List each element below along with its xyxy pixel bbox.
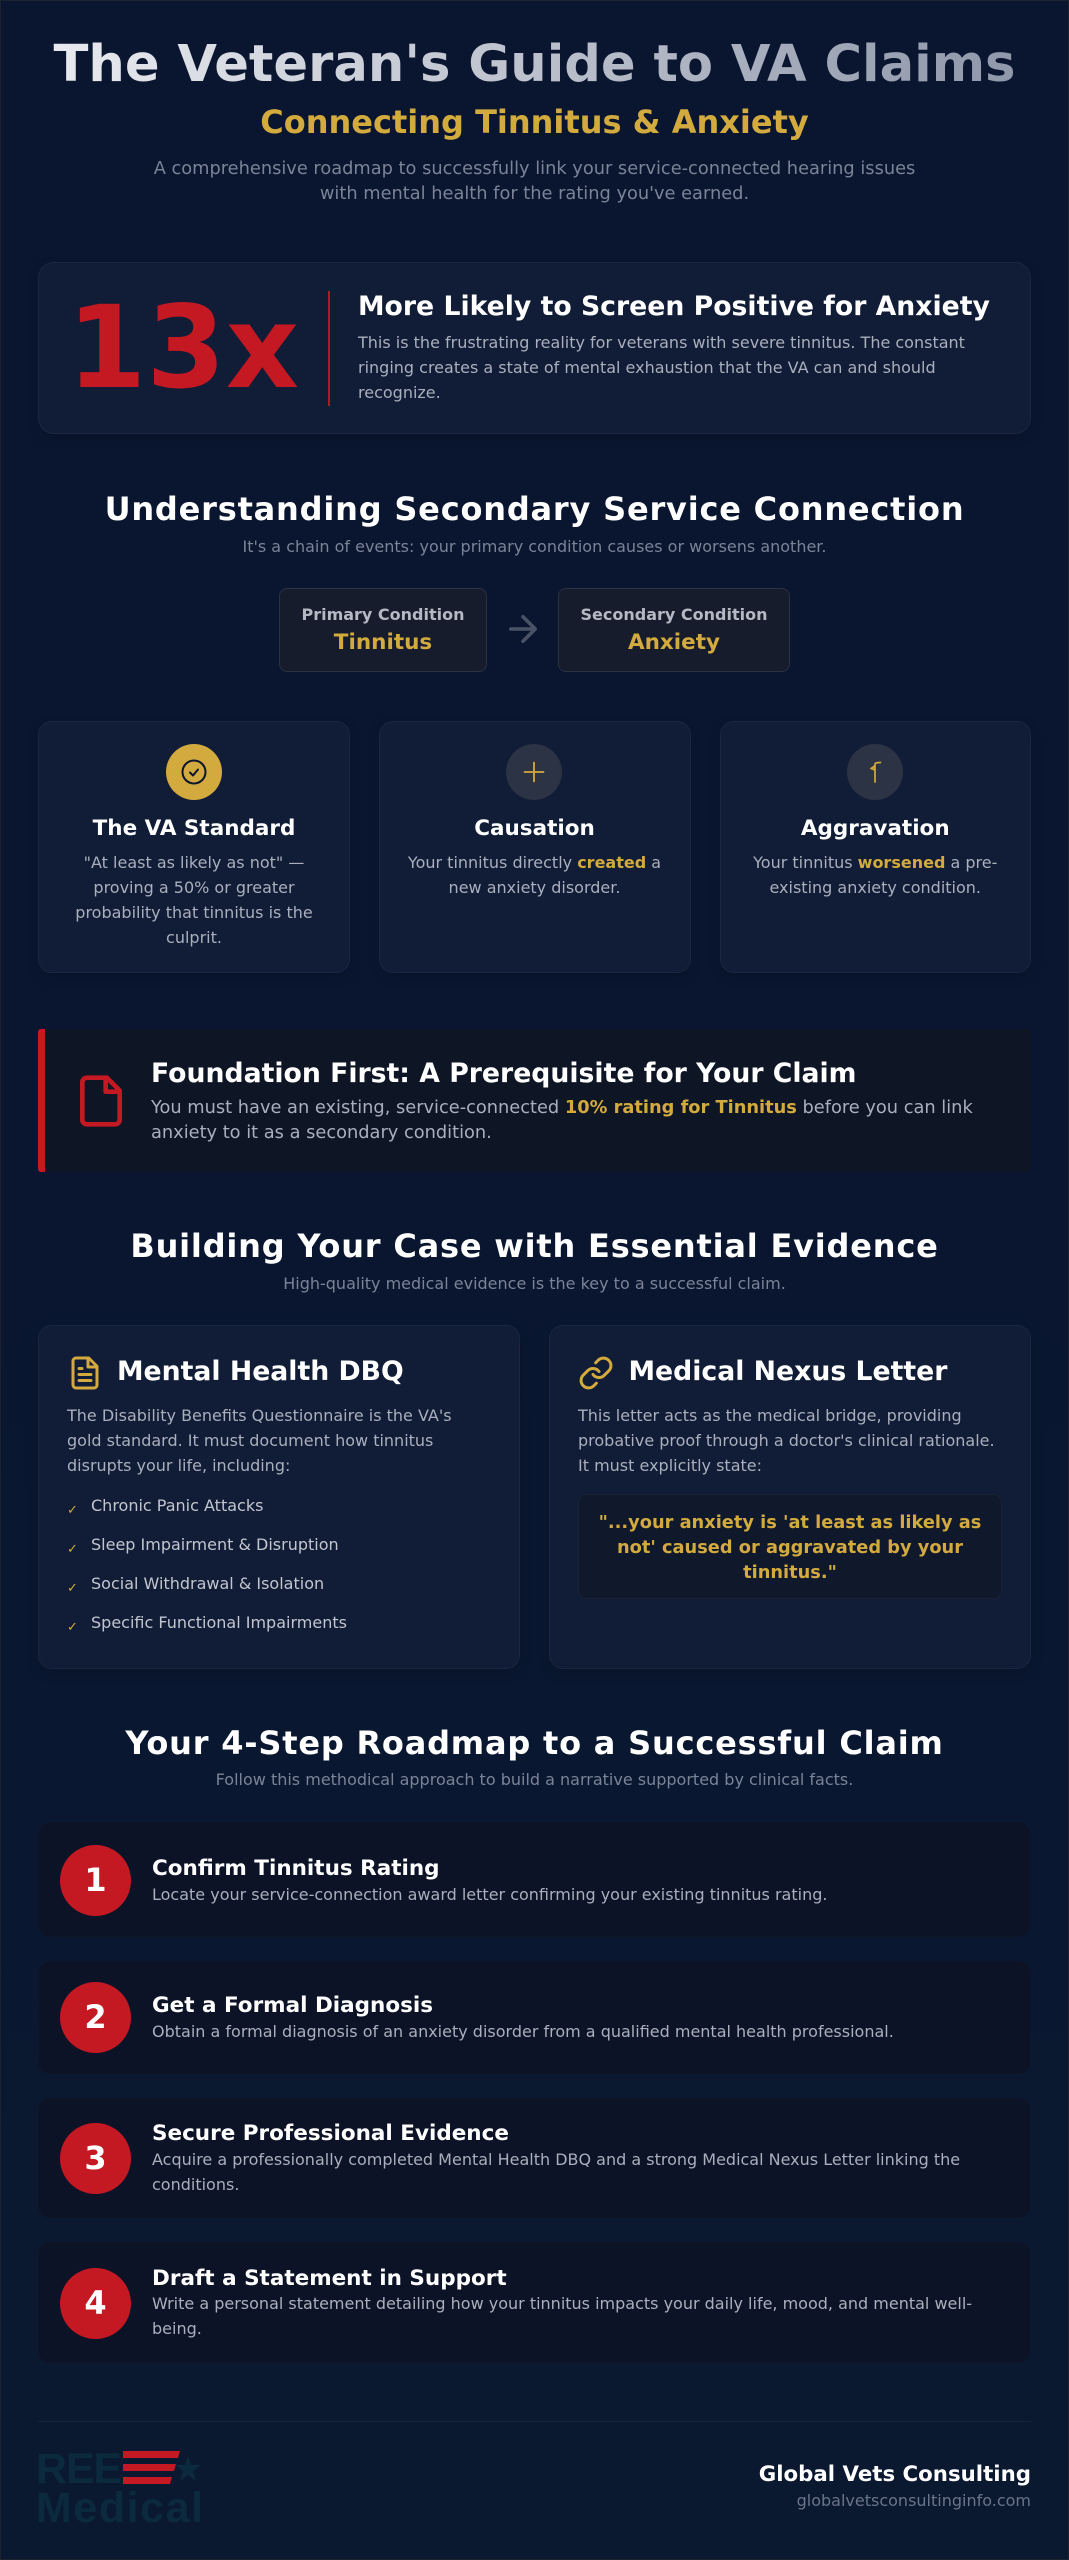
- card text: probative proof through a doctor's clinical rationale.: [578, 1431, 995, 1450]
- icon: file text: [72, 1356, 98, 1390]
- quote box: [578, 1494, 1002, 1599]
- callout text: You must have an existing, service-connected 10% rating for Tinnitus before you can link: [151, 1097, 973, 1118]
- card text: probability that tinnitus is the: [75, 903, 313, 922]
- card text: new anxiety disorder.: [449, 878, 620, 897]
- card text: [753, 853, 997, 897]
- card text: gold standard. It must document how tinnitus: [67, 1431, 433, 1450]
- step text: Obtain a formal diagnosis of an anxiety disorder from a qualified mental health professional.: [152, 2022, 894, 2041]
- card heading: Mental Health DBQ: [117, 1356, 404, 1387]
- section subtitle: High-quality medical evidence is the key to a successful claim.: [283, 1274, 786, 1293]
- statistic description: [358, 333, 965, 402]
- panel: foundation first: [38, 1029, 1031, 1172]
- card text: Your tinnitus directly created a: [408, 853, 661, 872]
- icon: small hook: [847, 744, 903, 800]
- checklist: Social Withdrawal & Isolation: [91, 1574, 324, 1593]
- subtitle: Connecting Tinnitus & Anxiety: [260, 103, 809, 141]
- quote box: tinnitus.": [743, 1562, 837, 1583]
- number badge: [60, 2123, 131, 2194]
- card text: disrupts your life, including:: [67, 1456, 290, 1475]
- icon: link: [580, 1356, 612, 1390]
- step title: Get a Formal Diagnosis: [152, 1993, 433, 2018]
- number badge: [60, 1845, 131, 1916]
- card text: [578, 1406, 995, 1475]
- statistic description: ringing creates a state of mental exhaustion that the VA can and should: [358, 358, 936, 377]
- statistic heading: More Likely to Screen Positive for Anxiety: [358, 291, 990, 322]
- primary condition box: Tinnitus: [334, 630, 432, 655]
- title: The Veteran's Guide to VA Claims: [53, 34, 1016, 94]
- panel: aggravation: [720, 721, 1031, 973]
- footer brand: Global Vets Consulting: [759, 2462, 1031, 2487]
- step title: Draft a Statement in Support: [152, 2266, 507, 2291]
- checklist: Chronic Panic Attacks: [91, 1496, 263, 1515]
- heading: secondary service connection: Understanding Secondary Service Connection: [105, 490, 964, 528]
- footer brand: [759, 2462, 1031, 2510]
- step text: being.: [152, 2319, 202, 2338]
- step title: Secure Professional Evidence: [152, 2121, 509, 2146]
- card text: [75, 853, 313, 947]
- number badge: 1: [84, 1861, 107, 1899]
- panel: causation: [378, 721, 690, 973]
- card text: [66, 1406, 452, 1475]
- secondary condition box: [558, 588, 790, 672]
- secondary condition box: Anxiety: [628, 630, 720, 655]
- card text: Your tinnitus worsened a pre-: [753, 853, 997, 872]
- step title: Confirm Tinnitus Rating: [152, 1856, 440, 1881]
- panel: the VA standard: [38, 721, 350, 973]
- primary condition box: [279, 588, 487, 672]
- checklist: Sleep Impairment & Disruption: [91, 1535, 339, 1554]
- card text: This letter acts as the medical bridge, providing: [578, 1406, 962, 1425]
- panel: 13x statistic: [38, 262, 1031, 434]
- card text: It must explicitly state:: [578, 1456, 762, 1475]
- section subtitle: It's a chain of events: your primary condition causes or worsens another.: [242, 537, 826, 556]
- card text: The Disability Benefits Questionnaire is the VA's: [67, 1406, 452, 1425]
- number badge: [60, 1982, 131, 2053]
- intro text: with mental health for the rating you've earned.: [320, 183, 749, 204]
- number badge: 3: [84, 2139, 107, 2177]
- statistic description: This is the frustrating reality for veterans with severe tinnitus. The constant: [358, 333, 965, 352]
- icon: check circle: [166, 744, 222, 800]
- footer brand: globalvetsconsultinginfo.com: [797, 2491, 1031, 2510]
- secondary condition box: Secondary Condition: [581, 605, 767, 624]
- heading: roadmap: Your 4-Step Roadmap to a Successful Claim: [125, 1724, 944, 1762]
- card heading: Medical Nexus Letter: [628, 1356, 947, 1387]
- step text: [152, 2150, 960, 2194]
- checklist: Specific Functional Impairments: [91, 1613, 347, 1632]
- card text: "At least as likely as not" —: [84, 853, 304, 872]
- card text: proving a 50% or greater: [93, 878, 295, 897]
- panel: medical nexus letter: [549, 1325, 1031, 1669]
- intro text: [154, 158, 915, 204]
- heading: building your case: Building Your Case with Essential Evidence: [130, 1227, 939, 1265]
- card title: Aggravation: [801, 816, 950, 841]
- big number: 13x: [67, 281, 299, 414]
- checklist: ✓: [67, 1620, 78, 1635]
- icon: file: [80, 1075, 122, 1127]
- panel: mental health DBQ: [38, 1325, 520, 1669]
- icon: plus: [506, 744, 562, 800]
- callout text: anxiety to it as a secondary condition.: [151, 1122, 492, 1143]
- callout heading: Foundation First: A Prerequisite for Your Claim: [151, 1058, 856, 1089]
- arrow: [509, 614, 537, 644]
- quote box: not' caused or aggravated by your: [617, 1537, 963, 1558]
- logo: REE Medical: Medical: [36, 2484, 203, 2532]
- logo: REE Medical: REE: [36, 2445, 122, 2493]
- statistic description: recognize.: [358, 383, 441, 402]
- section subtitle: Follow this methodical approach to build a narrative supported by clinical facts.: [216, 1770, 853, 1789]
- step text: conditions.: [152, 2175, 239, 2194]
- card text: existing anxiety condition.: [769, 878, 981, 897]
- checklist: [67, 1496, 347, 1635]
- checklist: ✓: [67, 1581, 78, 1596]
- step 1: [38, 1822, 1031, 1937]
- number badge: 2: [84, 1998, 107, 2036]
- callout text: [151, 1097, 973, 1143]
- card title: Causation: [474, 816, 595, 841]
- number badge: [60, 2268, 131, 2339]
- checklist: ✓: [67, 1503, 78, 1518]
- step 3: [38, 2098, 1031, 2218]
- card text: culprit.: [166, 928, 222, 947]
- step text: Locate your service-connection award letter confirming your existing tinnitus rating.: [152, 1885, 827, 1904]
- step text: Acquire a professionally completed Mental Health DBQ and a strong Medical Nexus Letter linking the: [152, 2150, 960, 2169]
- card text: [408, 853, 661, 897]
- step 2: [38, 1961, 1031, 2074]
- quote box: "...your anxiety is 'at least as likely as: [599, 1512, 981, 1533]
- primary condition box: Primary Condition: [301, 605, 465, 624]
- step text: Write a personal statement detailing how your tinnitus impacts your daily life, mood, and mental well-: [152, 2294, 972, 2313]
- card title: The VA Standard: [93, 816, 295, 841]
- logo: REE Medical: [36, 2445, 203, 2532]
- step 4: [38, 2242, 1031, 2363]
- intro text: A comprehensive roadmap to successfully link your service-connected hearing issues: [154, 158, 915, 179]
- number badge: 4: [84, 2284, 107, 2322]
- checklist: ✓: [67, 1542, 78, 1557]
- step text: [152, 2294, 972, 2338]
